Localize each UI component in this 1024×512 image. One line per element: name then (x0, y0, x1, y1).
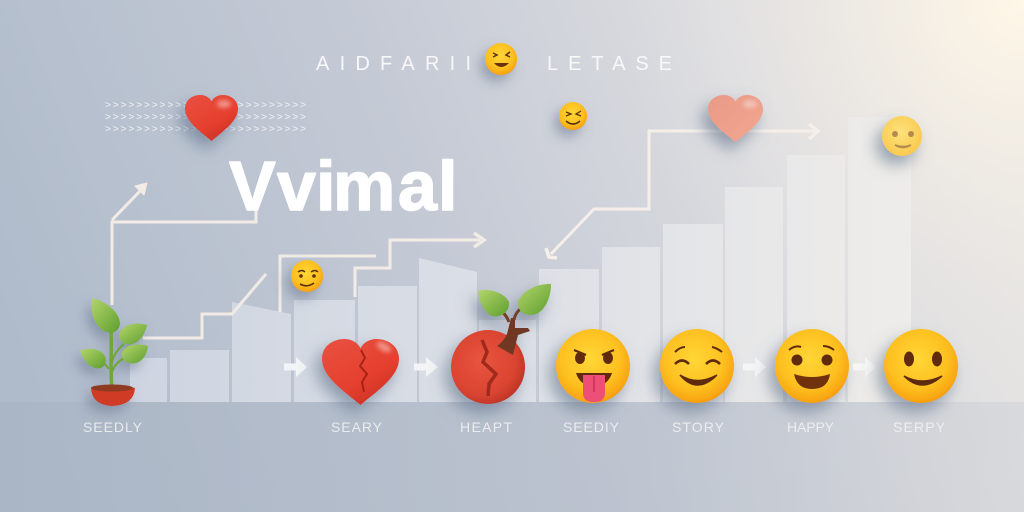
chevron pattern (105, 100, 306, 135)
chevron pattern: >>>>>>>>>>>>>>>>>>>>>>>>>> (105, 112, 306, 123)
stage labels: SERPY (893, 419, 946, 435)
arrow 4 (853, 357, 876, 377)
icon: open mouth emoji (775, 329, 849, 403)
bar chart (130, 117, 911, 402)
chevron pattern: >>>>>>>>>>>>>>>>>>>>>>>>>> (105, 100, 306, 111)
icon: small laughing emoji top (485, 43, 517, 75)
icon: small squinting emoji (559, 102, 587, 130)
icon: smiling closed eyes emoji (660, 329, 734, 403)
small heading left: AIDFARII (316, 53, 471, 75)
chevron pattern: >>>>>>>>>>>>>>>>>>>>>>>>>> (105, 124, 306, 135)
stage labels: STORY (672, 419, 725, 435)
stage labels: SEEDLY (83, 419, 143, 435)
icon: seedling in pot (80, 298, 148, 406)
trend arrow: right (546, 124, 818, 258)
icon: pale smiley top right (882, 116, 922, 156)
stage labels: SEARY (331, 419, 383, 435)
stage labels (83, 419, 946, 435)
stage labels: HAPPY (787, 419, 835, 435)
icon: small wink emoji (291, 260, 323, 292)
arrow 2 (414, 357, 438, 377)
icon: red heart top (185, 95, 238, 141)
icon: tongue emoji (556, 329, 630, 403)
stage labels: SEEDIY (563, 419, 620, 435)
icon: cracked apple with sprout (451, 284, 551, 404)
title: Vvimal (229, 147, 457, 225)
arrow 1 (284, 357, 307, 377)
icon: broken heart (322, 339, 399, 405)
icon: peach heart (708, 95, 763, 142)
trend arrow: middle (355, 233, 484, 297)
icon: smiley emoji (884, 329, 958, 403)
trend arrow: upper left (112, 183, 256, 305)
small heading right: LETASE (547, 53, 672, 75)
trend line: lower left step (143, 274, 266, 338)
stage labels: HEAPT (460, 419, 512, 435)
trend line: middle step (280, 256, 376, 312)
arrow 3 (743, 357, 766, 377)
